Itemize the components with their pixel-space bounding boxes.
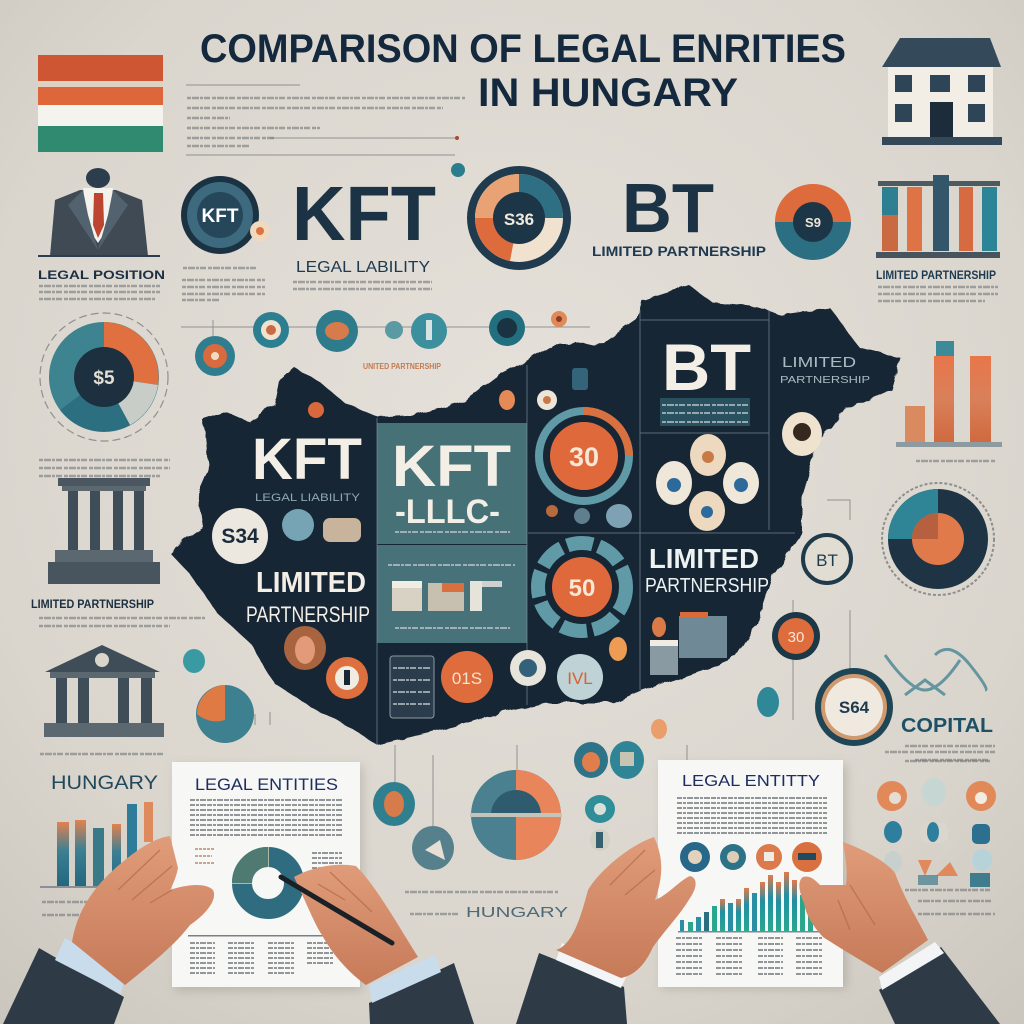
cuff	[556, 943, 627, 988]
sleeve	[516, 953, 627, 1024]
icon: S36 coin: S34	[221, 525, 259, 548]
panel dividers	[377, 310, 795, 745]
title: COMPARISON OF LEGAL ENRITIES	[200, 27, 846, 71]
bottom icons	[390, 637, 627, 718]
hand: left hand holding left page	[3, 836, 214, 1024]
icon: orange dial 30: 30	[569, 442, 599, 472]
caption: hungary bottom centre: HUNGARY	[466, 904, 568, 921]
text: limited map right	[780, 354, 870, 386]
label: limited partnership right	[876, 268, 998, 301]
text: limited partnership map left: LIMITED	[256, 567, 366, 599]
text: limited map right: LIMITED	[782, 354, 856, 371]
document: left page	[172, 762, 363, 991]
document: right page	[658, 760, 847, 989]
hand: right hand with pen	[281, 865, 474, 1024]
palm and fingers	[72, 836, 214, 985]
title: IN HUNGARY	[478, 71, 738, 115]
bar chart: right top	[896, 341, 1002, 461]
icon: small ring chart: S9	[805, 215, 821, 230]
label: limited partnership right: LIMITED PARTNERSHIP	[876, 268, 996, 282]
text: limited partnership map left: PARTNERSHIP	[246, 602, 370, 627]
page title: LEGAL ENTITIES	[195, 775, 338, 794]
sleeve	[369, 963, 474, 1024]
bar chart: bottom left	[40, 802, 158, 915]
label: limited partnership: LIMITED PARTNERSHIP	[592, 244, 766, 259]
connector row of circles	[181, 310, 590, 376]
photos	[650, 612, 727, 675]
intro text block	[186, 85, 465, 155]
heading: KFT: KFT	[292, 171, 436, 257]
center icons lower	[373, 741, 687, 870]
icon group: four cream badges	[656, 412, 822, 531]
badge: BT	[793, 500, 851, 720]
label: legal position: LEGAL POSITION	[38, 268, 165, 282]
page legend	[312, 853, 342, 868]
pie chart: left	[40, 313, 168, 441]
icon: KFT badge	[181, 176, 270, 254]
map silhouette	[170, 285, 901, 745]
text: caption left	[40, 753, 165, 755]
icon: coloured columns	[876, 175, 1000, 258]
label: orange caption: UNITED PARTNERSHIP	[363, 362, 442, 371]
bottom icons: IVL	[567, 669, 593, 688]
label: Hungary: HUNGARY	[51, 773, 158, 794]
label: legal liability: LEGAL LABILITY	[296, 259, 430, 276]
label: limited partnership left	[31, 597, 205, 626]
palm and fingers	[799, 842, 928, 973]
icon: orange dial 30	[539, 411, 629, 501]
panel: KFT LLC	[377, 423, 527, 544]
text: limited partnership map right: LIMITED	[649, 543, 759, 574]
text: limited partnership map right	[645, 543, 769, 597]
page paragraph	[190, 800, 343, 835]
map icons mid column	[499, 368, 632, 528]
heading: BT: BT	[622, 169, 714, 247]
small icons near map left	[183, 649, 270, 743]
page title: LEGAL ENTITTY	[682, 773, 820, 790]
hand: right hand holding right page	[799, 842, 1000, 1024]
sleeve	[3, 948, 124, 1024]
icon: Hungarian flag	[38, 55, 163, 152]
map of Hungary	[170, 285, 901, 745]
icon: orange dial 50	[538, 543, 626, 631]
panel: KFT LLC: -LLLC-	[395, 493, 500, 531]
icon: central ring chart	[467, 166, 571, 270]
page bar chart	[678, 872, 824, 932]
sleeve	[879, 947, 1000, 1024]
label: legal liability	[293, 259, 432, 289]
label: legal position	[38, 268, 165, 299]
finger creases	[118, 850, 172, 903]
finger creases	[610, 850, 655, 895]
pie chart: left: $5	[93, 368, 115, 389]
icon: S36 coin	[212, 508, 268, 564]
label: limited partnership left: LIMITED PARTNERSHIP	[31, 597, 154, 611]
map icons left	[282, 402, 361, 542]
panel: KFT LLC: KFT	[392, 434, 511, 499]
text: pie note	[39, 460, 170, 476]
icon: temple with pediment	[44, 645, 164, 737]
title	[200, 27, 846, 115]
panel: document tiles	[377, 545, 527, 643]
page paragraph	[677, 798, 827, 833]
text: legal liability on map: LEGAL LIABILITY	[255, 492, 361, 504]
icon: orange dial 50: 50	[569, 575, 595, 602]
icon: squiggle	[885, 649, 986, 695]
text: limited partnership map right: PARTNERSHIP	[645, 575, 769, 597]
badge: S64: S64	[839, 698, 870, 717]
icons: right bottom grid	[877, 752, 996, 914]
label: capital: COPITAL	[901, 715, 993, 737]
map icons bottom left	[284, 626, 368, 699]
icon: building	[882, 38, 1002, 145]
icon: business suit	[38, 168, 160, 257]
text: limited partnership map left	[246, 567, 370, 627]
page columns	[190, 943, 333, 973]
finger creases	[838, 885, 875, 930]
hand: left hand holding right page	[516, 837, 696, 1024]
label: capital	[901, 715, 995, 760]
icon: small teal drop	[651, 687, 779, 739]
badge: 30 orange	[772, 612, 820, 660]
page donut chart	[232, 847, 294, 909]
bottom icons: 01S	[452, 669, 482, 688]
text: KFT note	[182, 268, 265, 300]
badge: 30 orange: 30	[788, 629, 804, 646]
badge: S64	[815, 668, 893, 746]
text: KFT on map: KFT	[252, 427, 362, 492]
dot	[451, 163, 465, 177]
icon: temple dark	[48, 478, 160, 584]
page icon row	[680, 842, 822, 872]
cuff	[879, 942, 944, 990]
icon: small ring chart	[775, 184, 851, 260]
panel: BT caption	[660, 398, 750, 426]
text: limited map right: PARTNERSHIP	[780, 375, 870, 386]
heading: BT on map: BT	[662, 330, 751, 404]
cuff	[55, 938, 125, 994]
palm and fingers	[294, 865, 418, 985]
finger creases	[318, 872, 372, 912]
icon: central ring chart: S36	[504, 210, 534, 229]
donut chart: right	[882, 483, 994, 595]
icon: KFT badge: KFT	[202, 206, 239, 227]
badge: BT: BT	[816, 551, 838, 570]
page columns	[676, 938, 823, 974]
cuff	[369, 955, 441, 1003]
palm and fingers	[556, 837, 696, 978]
pen	[281, 877, 392, 943]
